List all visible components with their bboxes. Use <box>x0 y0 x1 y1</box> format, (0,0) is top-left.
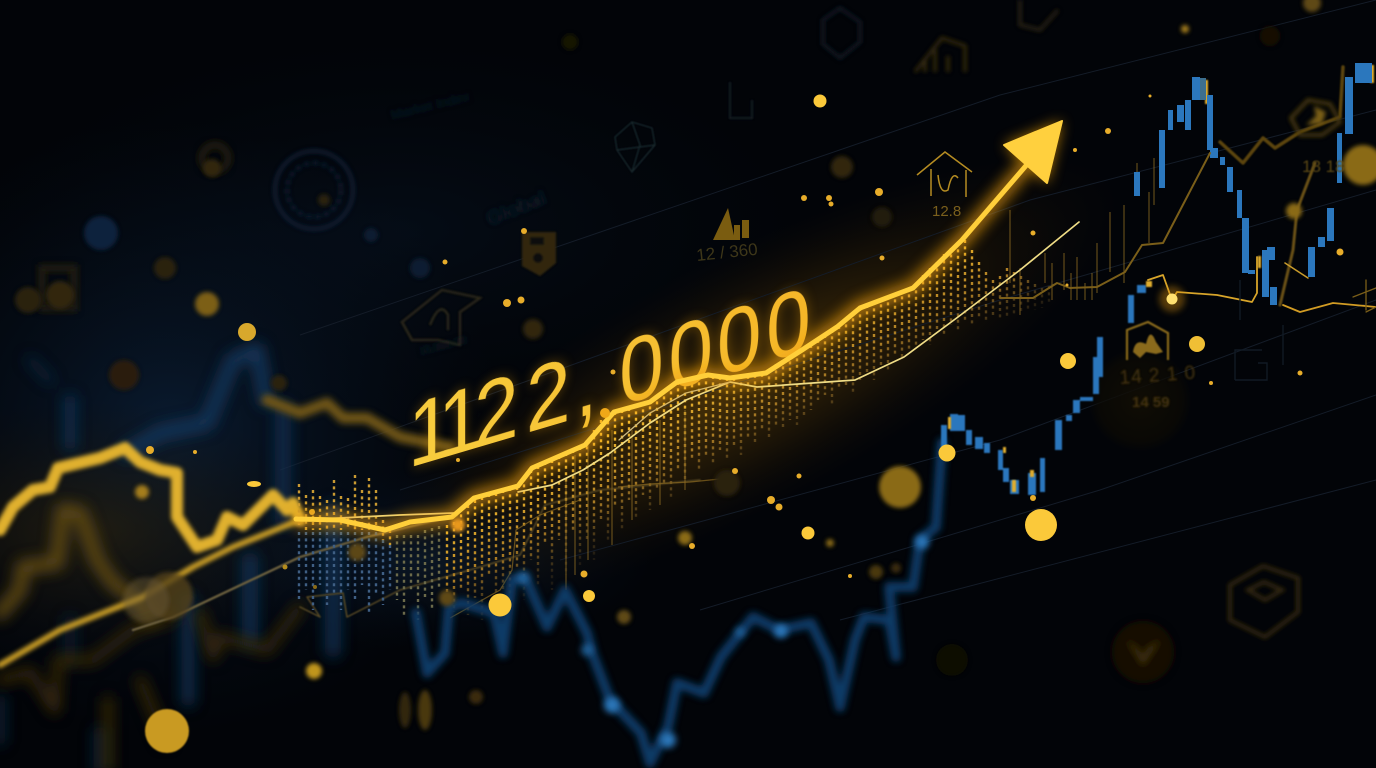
thin gold line: lower centre <box>450 478 730 618</box>
gold line: lower hazy <box>0 510 150 617</box>
gold line: straight rising <box>0 520 300 665</box>
icon: top right house bars <box>915 38 965 72</box>
thin vertical bars <box>566 158 1154 590</box>
trace: dim rising <box>1000 153 1210 298</box>
blurred gold lines, left <box>0 400 700 768</box>
thin line: angular faint <box>300 480 700 617</box>
dot field: under main line <box>447 240 1049 620</box>
blue hot spots <box>517 535 929 748</box>
label: far right figure: 18 18 <box>1302 157 1345 176</box>
gold line: thick upper left <box>0 448 300 547</box>
faint schematic, right <box>1235 280 1283 380</box>
trace: edge marker <box>1353 280 1376 312</box>
icon: top gear <box>1020 0 1058 30</box>
bokeh: bright dots <box>145 94 1205 753</box>
icon: left hazy ring <box>202 145 228 171</box>
thin rising yellow line <box>300 222 1079 520</box>
big number: 1122, 0000 <box>408 267 811 488</box>
blurred blue chart line, bottom centre <box>416 443 942 763</box>
icon: bar chart with label, centre <box>695 208 759 265</box>
icon: house outline <box>402 290 480 345</box>
icon: house with label, centre <box>917 152 972 220</box>
icon: diamond <box>615 122 655 172</box>
glow spark on main line <box>451 286 1185 532</box>
faint perspective grid lines <box>280 0 1376 620</box>
blue candlesticks, upper right <box>1134 63 1372 305</box>
trace: bright mid <box>1148 257 1257 302</box>
faint icons, upper area <box>42 0 1058 345</box>
icon: padlock badge <box>522 232 556 276</box>
icon: circular emblem <box>275 151 353 229</box>
icon: hazy hex, upper right <box>1291 100 1340 135</box>
label: 12 / 360: 12 / 360 <box>695 240 759 265</box>
faint data labels: 15,000.00 <box>418 334 468 358</box>
label: figure one: 14 2 1 0 <box>1119 363 1197 389</box>
thin line: secondary rising <box>133 515 457 630</box>
icon: top small chart <box>730 82 752 118</box>
dot field: left blue section <box>299 475 439 620</box>
icon: top shield <box>823 8 860 58</box>
faint data labels: Market Index <box>389 88 471 123</box>
icon: hazy box, bottom right <box>1230 566 1298 637</box>
blurred blue line, far left <box>0 350 333 768</box>
faint data labels: Global <box>484 187 550 231</box>
icon: house with numbers, right <box>1119 322 1197 411</box>
icon: left hazy box <box>42 268 74 308</box>
label: 12.8: 12.8 <box>932 203 961 220</box>
trace: short diagonal <box>1285 263 1308 278</box>
gold line: upper hazy <box>267 400 450 447</box>
gold line: bottom hazy <box>0 607 300 768</box>
icon: hazy badge, bottom right <box>1112 621 1174 683</box>
main line: core <box>296 161 1030 530</box>
trace: upper zigzag <box>1220 67 1343 163</box>
gold traces, right <box>1000 67 1376 312</box>
blue candlesticks, mid right <box>941 285 1146 495</box>
trace: bright right <box>1283 303 1376 312</box>
arrow: glow <box>1004 121 1062 183</box>
main rising line with arrow <box>296 121 1062 530</box>
label: figure two: 14 59 <box>1132 394 1170 411</box>
bokeh: small sparks <box>146 94 1344 589</box>
trace: steep <box>1280 163 1315 305</box>
arrow: head <box>1004 121 1062 183</box>
main line: outer glow <box>300 167 1025 530</box>
candle tips, gold <box>948 65 1374 492</box>
faint data labels <box>389 88 550 358</box>
dark disc behind right icon <box>1088 348 1192 452</box>
